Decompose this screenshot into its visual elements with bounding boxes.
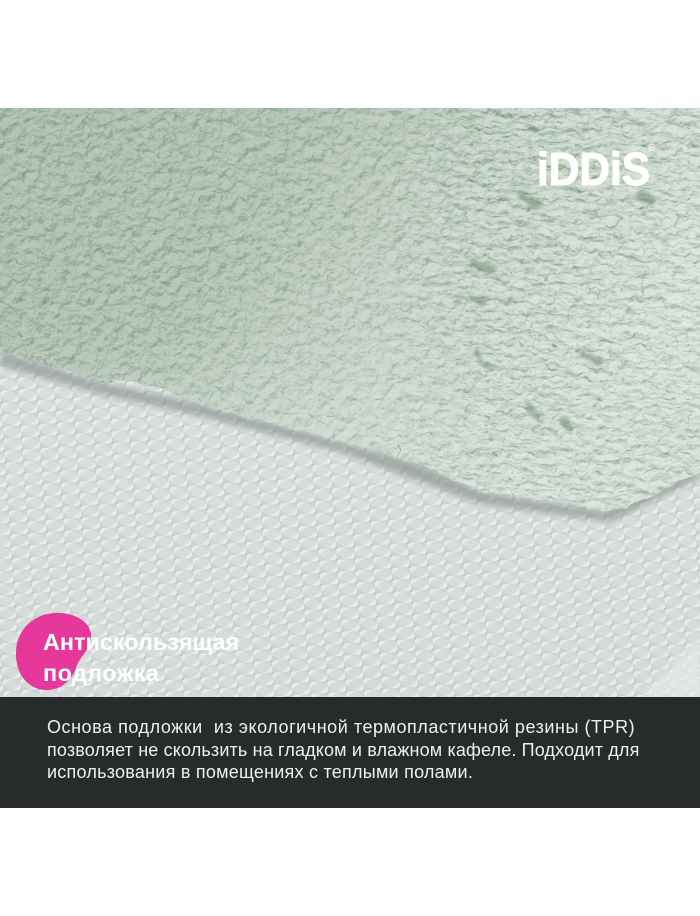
product photo: green shaggy rug on textured anti-slip backing — [0, 108, 700, 697]
description text — [47, 717, 639, 782]
description text: Основа подложки из экологичной термопластичной резины (TPR) — [47, 717, 635, 737]
heading: Антискользящая — [43, 629, 239, 655]
IDDIS logo: ® — [648, 143, 656, 154]
anti-slip backing surface — [0, 108, 700, 697]
infographic page — [0, 108, 700, 808]
description text: позволяет не скользить на гладком и влажном кафеле. Подходит для — [47, 740, 639, 760]
heading: подложка — [43, 660, 159, 686]
shaggy rug pile — [0, 90, 700, 530]
description text: использования в помещениях с теплыми полами. — [47, 762, 473, 782]
IDDIS logo: iDDiS — [537, 143, 650, 195]
tufted shadows — [468, 190, 656, 431]
heading — [43, 629, 239, 686]
description panel — [0, 697, 700, 808]
pink accent blob — [16, 613, 91, 690]
